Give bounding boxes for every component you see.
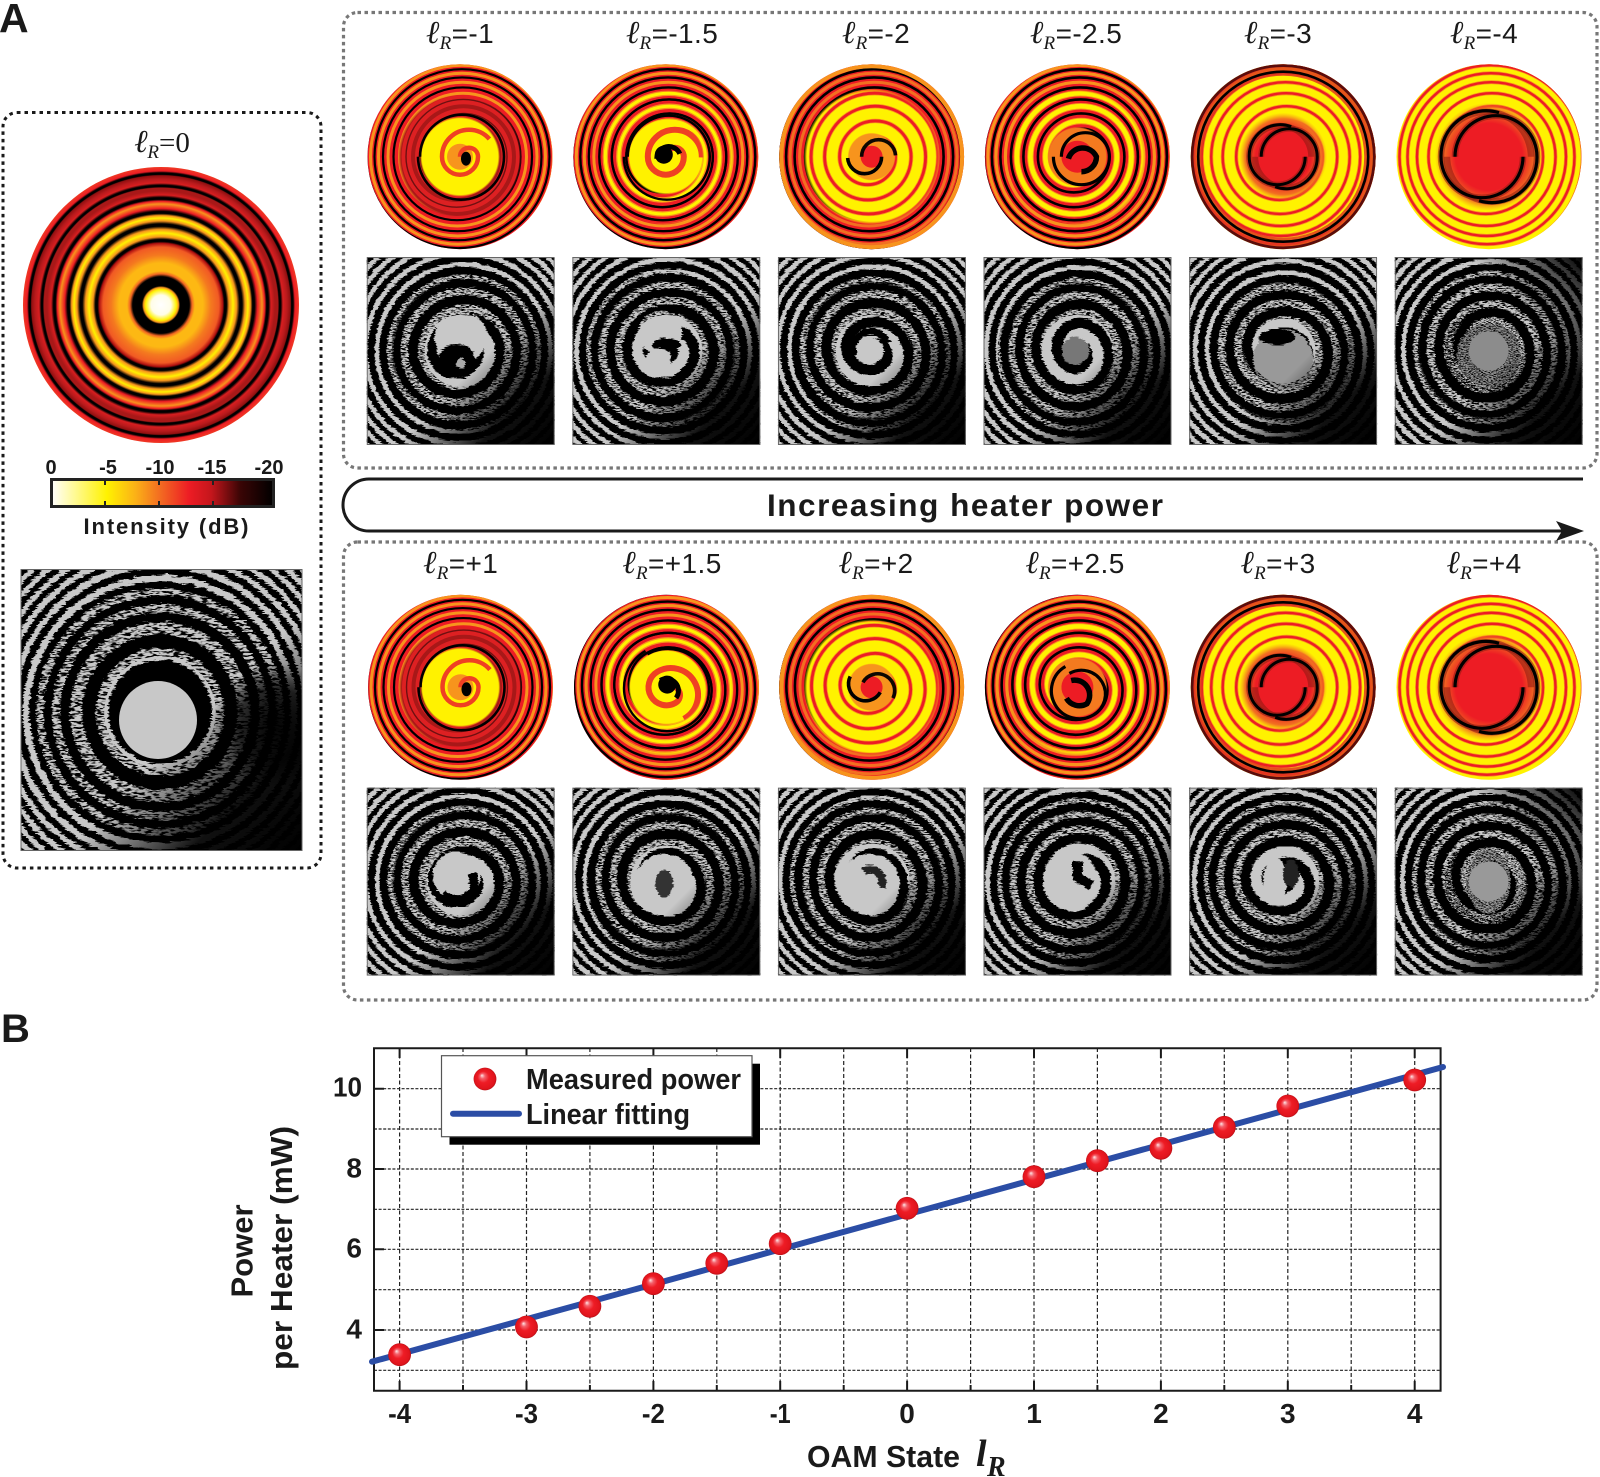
- simulated intensity disc lR=0: [23, 167, 299, 443]
- simulated discs: positive states: [355, 544, 1590, 830]
- simulated discs: negative states: [354, 53, 1590, 260]
- labels: positive states: =+1.5: [648, 548, 722, 579]
- labels: positive states: ℓ: [423, 544, 437, 580]
- x-axis tick labels: 0: [899, 1398, 915, 1429]
- labels: negative states: =-2.5: [1056, 18, 1122, 49]
- y-axis tick labels: [333, 1072, 362, 1344]
- colour bar: -20: [255, 457, 283, 479]
- labels: positive states: ℓ: [838, 544, 852, 580]
- label: lR=0: ℓ: [134, 123, 148, 159]
- labels: negative states: =-4: [1476, 18, 1518, 49]
- colour bar title: Intensity (dB): [84, 514, 248, 539]
- labels: positive states: R: [1459, 563, 1472, 584]
- labels: negative states: R: [439, 33, 452, 54]
- labels: positive states: R: [1038, 563, 1051, 584]
- colour bar: 0: [45, 457, 57, 479]
- chart legend: Measured power: [526, 1064, 741, 1096]
- panel: negative OAM states: [344, 12, 1597, 468]
- x-axis title: OAM State: [807, 1439, 960, 1474]
- y-axis tick labels: 8: [346, 1152, 362, 1184]
- x-axis tick labels: -1: [770, 1398, 791, 1429]
- chart frame and ticks: [374, 1048, 1441, 1391]
- x-axis title: [807, 1433, 1006, 1477]
- measured fringes: negative states: [366, 257, 1583, 445]
- labels: negative states: =-1.5: [652, 18, 718, 49]
- chart legend: Linear fitting: [526, 1099, 690, 1131]
- x-axis tick labels: -3: [515, 1398, 538, 1429]
- y-axis tick labels: 10: [333, 1072, 362, 1102]
- labels: negative states: ℓ: [1450, 14, 1464, 50]
- label: lR=0: =0: [159, 127, 190, 159]
- labels: positive states: ℓ: [622, 544, 636, 580]
- x-axis tick labels: 2: [1153, 1398, 1169, 1429]
- labels: positive states: =+3: [1266, 548, 1316, 579]
- labels: positive states: R: [436, 563, 449, 584]
- labels: negative states: [426, 14, 1518, 54]
- panel: positive OAM states: [344, 542, 1597, 1000]
- arrow caption: Increasing heater power: [767, 487, 1163, 523]
- labels: negative states: ℓ: [426, 14, 440, 50]
- arrow: increasing heater power: [343, 479, 1584, 541]
- measured fringe image lR=0: [20, 569, 302, 851]
- colour bar: [45, 457, 283, 508]
- measured data points: [388, 1069, 1426, 1366]
- chart B: power per heater versus OAM state: [224, 1048, 1443, 1477]
- y-axis tick labels: 4: [346, 1314, 362, 1344]
- colour bar: -5: [99, 457, 117, 479]
- x-axis tick labels: -4: [388, 1398, 411, 1429]
- labels: negative states: =-2: [868, 18, 910, 49]
- colour bar: -10: [146, 457, 174, 479]
- labels: positive states: R: [1253, 563, 1266, 584]
- labels: negative states: R: [855, 33, 868, 54]
- x-axis tick labels: -2: [642, 1398, 665, 1429]
- y-axis title: per Heater (mW): [264, 1126, 299, 1370]
- x-axis tick labels: 4: [1407, 1398, 1423, 1429]
- x-axis tick labels: [388, 1398, 1423, 1429]
- chart legend: [442, 1056, 760, 1145]
- labels: negative states: =-3: [1270, 18, 1312, 49]
- labels: negative states: R: [1463, 33, 1476, 54]
- x-axis tick labels: 1: [1026, 1398, 1042, 1429]
- labels: negative states: R: [1043, 33, 1056, 54]
- linear fit line: [372, 1067, 1443, 1362]
- measured fringes: positive states: [366, 788, 1583, 976]
- labels: positive states: =+2: [864, 548, 914, 579]
- labels: negative states: ℓ: [1030, 14, 1044, 50]
- labels: positive states: ℓ: [1446, 544, 1460, 580]
- y-axis title: [224, 1126, 299, 1370]
- panel label B: B: [1, 1007, 30, 1051]
- labels: positive states: R: [851, 563, 864, 584]
- labels: positive states: =+2.5: [1051, 548, 1125, 579]
- labels: positive states: =+4: [1472, 548, 1522, 579]
- labels: negative states: R: [1257, 33, 1270, 54]
- labels: positive states: R: [635, 563, 648, 584]
- x-axis title: l: [976, 1433, 987, 1475]
- labels: negative states: ℓ: [626, 14, 640, 50]
- labels: positive states: ℓ: [1240, 544, 1254, 580]
- labels: negative states: ℓ: [842, 14, 856, 50]
- labels: negative states: =-1: [452, 18, 494, 49]
- labels: positive states: =+1: [449, 548, 498, 579]
- labels: positive states: [423, 544, 1522, 584]
- x-axis tick labels: 3: [1280, 1398, 1296, 1429]
- labels: negative states: ℓ: [1244, 14, 1258, 50]
- panel: lR=0 reference state: [2, 111, 322, 870]
- y-axis title: Power: [224, 1204, 260, 1298]
- label: lR=0: R: [146, 142, 159, 163]
- colour bar: -15: [198, 457, 226, 479]
- chart grid: [400, 1048, 1415, 1391]
- labels: positive states: ℓ: [1025, 544, 1039, 580]
- labels: negative states: R: [639, 33, 652, 54]
- y-axis tick labels: 6: [346, 1232, 362, 1264]
